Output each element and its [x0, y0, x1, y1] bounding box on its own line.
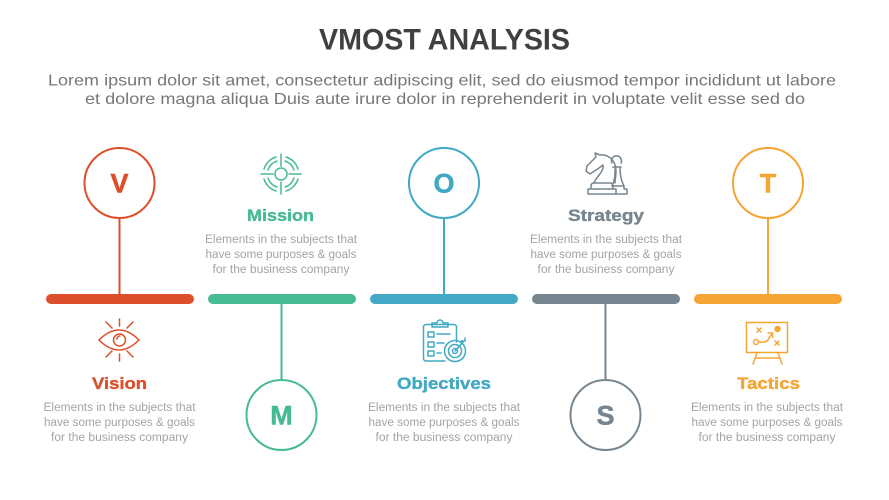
icon: chess pieces: [586, 153, 627, 194]
objectives stem and circle: [409, 148, 479, 296]
tactics text: Elements in the subjects that: [691, 402, 844, 414]
tactics text: [691, 402, 844, 444]
mission stem and circle: [246, 302, 316, 450]
vision bar: [46, 294, 194, 304]
panel: tactics: [691, 148, 844, 444]
tactics text: have some purposes & goals: [692, 417, 843, 429]
strategy text: [530, 234, 683, 276]
strategy text: for the business company: [538, 264, 675, 276]
icon: target: [261, 154, 301, 194]
objectives text: [368, 402, 521, 444]
mission text: [205, 234, 358, 276]
mission text: Elements in the subjects that: [205, 234, 358, 246]
mission heading: Mission: [247, 206, 314, 225]
title: VMOST ANALYSIS: [319, 24, 570, 56]
icon: clipboard and target: [424, 320, 466, 362]
objectives text: Elements in the subjects that: [368, 402, 521, 414]
vision letter: V: [110, 168, 129, 198]
tactics text: for the business company: [698, 432, 836, 444]
vision text: have some purposes & goals: [44, 417, 195, 429]
objectives bar: [370, 294, 518, 304]
objectives text: have some purposes & goals: [368, 417, 520, 429]
vision heading: Vision: [92, 374, 147, 393]
mission letter: M: [270, 400, 293, 430]
vision text: for the business company: [51, 432, 188, 444]
panel: objectives: [368, 148, 521, 444]
icon: eye: [99, 319, 139, 361]
vision text: [44, 402, 196, 444]
icon: tactics board: [746, 322, 788, 364]
strategy text: have some purposes & goals: [530, 249, 682, 261]
vision stem and circle: [84, 148, 154, 296]
subtitle: Lorem ipsum dolor sit amet, consectetur adipiscing elit, sed do eiusmod tempor incididunt ut labore: [48, 72, 836, 90]
tactics letter: T: [760, 168, 777, 198]
mission text: for the business company: [212, 264, 350, 276]
strategy letter: S: [596, 400, 615, 430]
tactics stem and circle: [733, 148, 803, 296]
tactics bar: [694, 294, 842, 304]
subtitle: et dolore magna aliqua Duis aute irure dolor in reprehenderit in voluptate velit esse sed do: [85, 91, 805, 108]
panel: mission: [205, 154, 358, 450]
mission text: have some purposes & goals: [206, 249, 357, 261]
strategy stem and circle: [570, 302, 640, 450]
objectives heading: Objectives: [397, 374, 491, 393]
objectives letter: O: [433, 168, 455, 198]
subtitle: [48, 72, 836, 108]
strategy text: Elements in the subjects that: [530, 234, 683, 246]
panel: strategy: [530, 153, 683, 450]
mission bar: [208, 294, 356, 304]
panel: vision: [44, 148, 196, 444]
tactics heading: Tactics: [737, 374, 800, 393]
strategy heading: Strategy: [568, 206, 645, 225]
objectives text: for the business company: [376, 432, 513, 444]
vision text: Elements in the subjects that: [44, 402, 196, 414]
strategy bar: [532, 294, 680, 304]
